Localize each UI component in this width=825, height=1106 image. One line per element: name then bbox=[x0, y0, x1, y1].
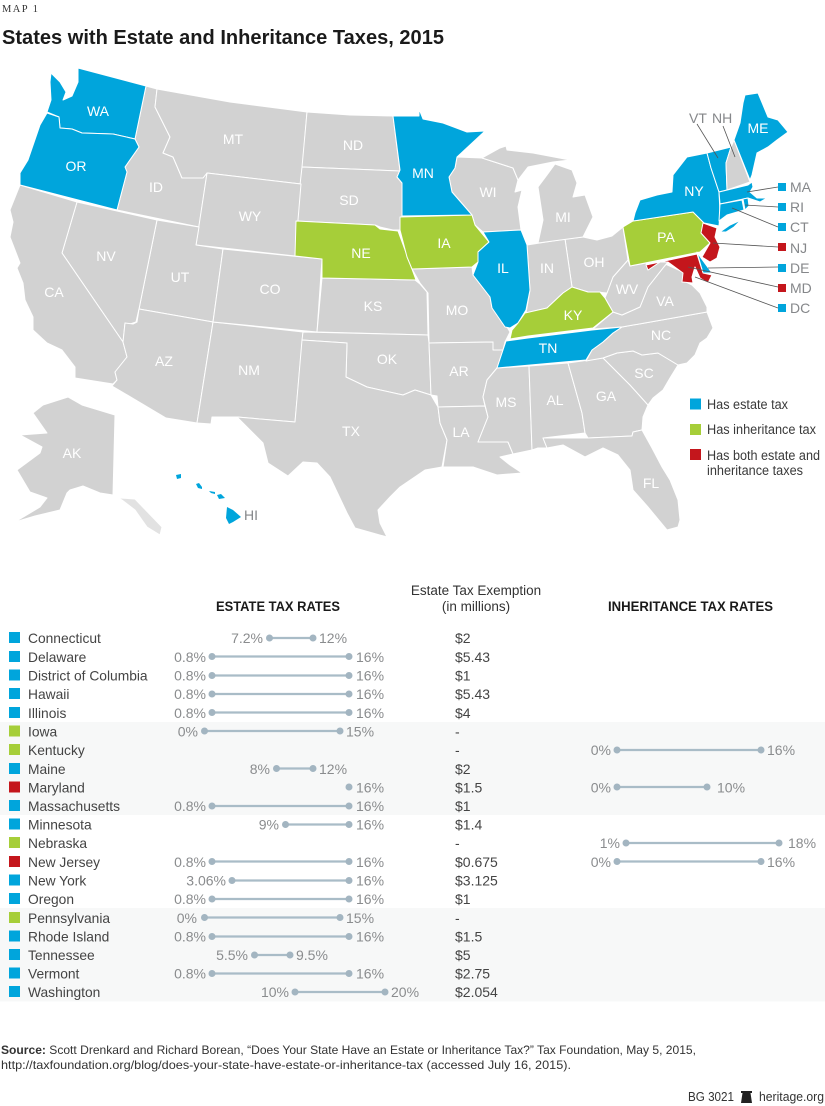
row: Hawaii: Hawaii bbox=[28, 687, 69, 702]
row: Minnesota: Minnesota bbox=[28, 818, 92, 832]
state: Oregon bbox=[20, 113, 139, 210]
state: North Carolina bbox=[586, 312, 713, 365]
state: Alaska panhandle bbox=[113, 495, 162, 535]
row: Nebraska: 18% bbox=[788, 835, 816, 851]
row: District of Columbia: $1 bbox=[455, 668, 471, 684]
state: Arizona: AZ bbox=[155, 353, 173, 369]
map legend: Has inheritance tax bbox=[707, 422, 816, 437]
row: Nebraska: - bbox=[455, 835, 460, 851]
row: Tennessee: Tennessee bbox=[28, 948, 95, 963]
row: New York bbox=[9, 872, 498, 888]
state: Alaska bbox=[15, 397, 115, 522]
state: Nebraska bbox=[295, 221, 416, 280]
row: Washington bbox=[9, 984, 498, 1000]
state: Minnesota: MN bbox=[412, 165, 434, 181]
state: California bbox=[10, 185, 127, 384]
state: Illinois: IL bbox=[497, 260, 509, 276]
row: District of Columbia bbox=[9, 668, 471, 684]
state: Rhode Island bbox=[743, 198, 749, 210]
state: Wisconsin: WI bbox=[479, 184, 497, 200]
row: Nebraska bbox=[9, 835, 816, 851]
state: Alabama: AL bbox=[546, 392, 564, 408]
row: Maine: $2 bbox=[455, 761, 471, 777]
row: Oregon: 0.8% bbox=[174, 891, 206, 907]
row: District of Columbia: District of Columbia bbox=[28, 668, 148, 684]
callout: MA label and leader bbox=[747, 179, 812, 195]
callout: CT label and leader bbox=[732, 208, 809, 235]
row: New Jersey: $0.675 bbox=[455, 854, 498, 870]
source note: http://taxfoundation.org/blog/does-your-state-have-estate-or-inheritance-tax (accessed July 16, 2015). bbox=[1, 1058, 571, 1072]
state: Ohio: OH bbox=[584, 254, 604, 270]
row: Illinois: 16% bbox=[356, 705, 384, 721]
row: New Jersey: New Jersey bbox=[28, 855, 100, 870]
row: Delaware: $5.43 bbox=[455, 649, 490, 665]
row: Massachusetts bbox=[9, 798, 471, 814]
row: Delaware: 16% bbox=[356, 649, 384, 665]
state: Arizona bbox=[112, 309, 213, 423]
callout: RI label and leader: RI bbox=[790, 199, 804, 215]
row: Pennsylvania: 15% bbox=[346, 910, 374, 926]
map legend: Has both estate and bbox=[707, 448, 820, 463]
row: New York: New York bbox=[28, 874, 86, 888]
state: Pennsylvania: PA bbox=[657, 229, 675, 245]
state: South Dakota bbox=[296, 167, 402, 230]
column heading: exemption bbox=[411, 583, 541, 614]
state: Maine bbox=[734, 93, 788, 180]
row: New York: 16% bbox=[356, 872, 384, 888]
state: Iowa bbox=[400, 215, 489, 269]
state: Arkansas bbox=[429, 342, 503, 407]
row: Kentucky: 0% bbox=[591, 742, 611, 758]
state: New Jersey bbox=[701, 223, 720, 262]
row: Delaware: Delaware bbox=[28, 650, 87, 665]
state: Delaware bbox=[697, 252, 712, 273]
row: Illinois: $4 bbox=[455, 705, 471, 721]
state: Idaho bbox=[117, 86, 207, 227]
state: South Carolina bbox=[603, 351, 678, 405]
state: South Carolina: SC bbox=[634, 365, 654, 381]
row: Pennsylvania: 0% bbox=[177, 910, 197, 926]
row: New York: $3.125 bbox=[455, 872, 498, 888]
row: Washington: Washington bbox=[28, 985, 100, 1000]
row: Iowa: - bbox=[455, 724, 460, 740]
row: Illinois: 0.8% bbox=[174, 705, 206, 721]
row: Maine: 8% bbox=[250, 761, 270, 777]
state: Washington bbox=[47, 68, 146, 139]
state: Texas bbox=[237, 340, 447, 537]
row: Oregon bbox=[9, 891, 471, 907]
row: Maryland: 10% bbox=[717, 780, 745, 796]
row: Kentucky: 16% bbox=[767, 742, 795, 758]
row: New Jersey: 16% bbox=[767, 854, 795, 870]
row: Hawaii: 0.8% bbox=[174, 686, 206, 702]
state: Hawaii bbox=[176, 474, 258, 524]
state: North Dakota bbox=[302, 112, 400, 171]
callout: RI label and leader bbox=[745, 199, 804, 215]
state: Texas: TX bbox=[342, 423, 361, 439]
row: Minnesota: $1.4 bbox=[455, 816, 482, 832]
state: New Hampshire bbox=[726, 140, 750, 190]
state: Indiana bbox=[526, 239, 572, 313]
row: Delaware: 0.8% bbox=[174, 649, 206, 665]
row: Maryland: $1.5 bbox=[455, 780, 482, 796]
row: Pennsylvania: - bbox=[455, 910, 460, 926]
footer: publication id: BG 3021 bbox=[688, 1090, 734, 1104]
state: Colorado: CO bbox=[260, 281, 281, 297]
row: Nebraska: 1% bbox=[600, 835, 620, 851]
state: Oregon: OR bbox=[66, 158, 86, 174]
state: Hawaii: HI bbox=[244, 507, 258, 523]
row: Nebraska: Nebraska bbox=[28, 836, 87, 851]
state: Iowa: IA bbox=[437, 235, 451, 251]
row: Rhode Island: Rhode Island bbox=[28, 930, 109, 944]
state: New York: NY bbox=[684, 183, 704, 199]
map label: MAP 1: MAP 1 bbox=[2, 4, 38, 15]
state: Tennessee bbox=[497, 327, 622, 368]
row: Washington: 20% bbox=[391, 984, 419, 1000]
row: Rhode Island bbox=[9, 928, 482, 944]
row: Hawaii: 16% bbox=[356, 686, 384, 702]
row: Kentucky bbox=[9, 742, 795, 758]
state: West Virginia: WV bbox=[616, 281, 639, 297]
row: Vermont: 16% bbox=[356, 966, 384, 982]
callout: VT label and leader bbox=[689, 110, 718, 158]
row: Massachusetts: 0.8% bbox=[174, 798, 206, 814]
state: Mississippi bbox=[478, 366, 532, 454]
row: Washington: 10% bbox=[261, 984, 289, 1000]
row: District of Columbia: 0.8% bbox=[174, 668, 206, 684]
callout: DC label and leader bbox=[695, 277, 810, 316]
row: District of Columbia: 16% bbox=[356, 668, 384, 684]
row: Rhode Island: 16% bbox=[356, 928, 384, 944]
state: Alaska: AK bbox=[63, 445, 82, 461]
row: Iowa: 0% bbox=[178, 724, 198, 740]
state: New York bbox=[633, 153, 720, 226]
state: Georgia: GA bbox=[596, 388, 617, 404]
row: Maine: 12% bbox=[319, 761, 347, 777]
callout: NH label and leader bbox=[712, 110, 735, 157]
state: Montana bbox=[155, 89, 307, 184]
callout: MA label and leader: MA bbox=[790, 179, 812, 195]
state: Maine: ME bbox=[748, 120, 768, 136]
footer: website: heritage.org bbox=[759, 1090, 824, 1104]
row: Maryland bbox=[9, 780, 745, 796]
callout: DE label and leader bbox=[708, 260, 809, 276]
state: Louisiana: LA bbox=[452, 424, 470, 440]
state: Nevada bbox=[62, 202, 157, 342]
source note: Source: Scott Drenkard and Richard Borean, “Does Your State Have an Estate or Inheritance Tax?” Tax Foundation, May 5, 2015, bbox=[1, 1043, 696, 1057]
row: Rhode Island: 0.8% bbox=[174, 928, 206, 944]
state: Montana: MT bbox=[223, 131, 244, 147]
state: New Mexico bbox=[197, 322, 303, 424]
state: South Dakota: SD bbox=[339, 192, 359, 208]
callout: MD label and leader: MD bbox=[790, 280, 812, 296]
state: Colorado bbox=[213, 249, 322, 332]
state: Ohio bbox=[565, 227, 628, 293]
row: Vermont bbox=[9, 966, 490, 982]
state: Kansas bbox=[317, 278, 428, 335]
row: Iowa: Iowa bbox=[28, 724, 57, 740]
state: Oklahoma: OK bbox=[377, 351, 398, 367]
row: New Jersey: 0.8% bbox=[174, 854, 206, 870]
state: Kentucky bbox=[510, 287, 613, 339]
callout: NJ label and leader: NJ bbox=[790, 240, 807, 256]
table rows bbox=[9, 630, 816, 1000]
row: Connecticut bbox=[9, 630, 471, 646]
state: Kentucky: KY bbox=[564, 307, 583, 323]
state: California: CA bbox=[44, 284, 64, 300]
row: New York: 3.06% bbox=[186, 872, 226, 888]
row: Massachusetts: 16% bbox=[356, 798, 384, 814]
source note bbox=[1, 1043, 696, 1072]
state: Kansas: KS bbox=[364, 298, 382, 314]
row: Maine: Maine bbox=[28, 762, 66, 777]
row: Minnesota bbox=[9, 816, 482, 832]
row: Connecticut: 7.2% bbox=[231, 630, 263, 646]
callout: CT label and leader: CT bbox=[790, 219, 809, 235]
row: Oregon: Oregon bbox=[28, 892, 74, 907]
row: Iowa: 15% bbox=[346, 724, 374, 740]
icon: liberty bell bbox=[741, 1091, 752, 1103]
row: Delaware bbox=[9, 649, 490, 665]
state: Mississippi: MS bbox=[496, 394, 516, 410]
map legend: inheritance taxes bbox=[707, 463, 803, 478]
column heading: exemption: (in millions) bbox=[442, 599, 510, 614]
state: Tennessee: TN bbox=[539, 340, 557, 356]
state: Michigan bbox=[538, 164, 593, 243]
row: Pennsylvania: Pennsylvania bbox=[28, 911, 110, 926]
row: Hawaii bbox=[9, 686, 490, 702]
row: Oregon: $1 bbox=[455, 891, 471, 907]
row: Pennsylvania bbox=[9, 910, 460, 926]
state: New Mexico: NM bbox=[238, 362, 260, 378]
row: Maryland: Maryland bbox=[28, 780, 85, 796]
row: Hawaii: $5.43 bbox=[455, 686, 490, 702]
row: Iowa bbox=[9, 724, 460, 740]
state: Nebraska: NE bbox=[351, 245, 371, 261]
callout: NH label and leader: NH bbox=[712, 110, 732, 126]
row: Massachusetts: $1 bbox=[455, 798, 471, 814]
state: Missouri bbox=[412, 267, 510, 350]
row: Massachusetts: Massachusetts bbox=[28, 799, 120, 814]
state: Pennsylvania bbox=[623, 212, 710, 266]
state: Missouri: MO bbox=[446, 302, 468, 318]
state: Louisiana bbox=[438, 406, 522, 475]
map legend bbox=[690, 397, 820, 478]
state: Idaho: ID bbox=[149, 179, 163, 195]
state: Maryland bbox=[646, 254, 712, 283]
state: Indiana: IN bbox=[540, 260, 554, 276]
state: Virginia: VA bbox=[656, 293, 674, 309]
row: Tennessee: $5 bbox=[455, 947, 471, 963]
row: Vermont: $2.75 bbox=[455, 966, 490, 982]
state: North Dakota: ND bbox=[343, 137, 363, 153]
row: Maryland: 16% bbox=[356, 780, 384, 796]
state: Wisconsin bbox=[449, 157, 522, 232]
state: Florida bbox=[543, 430, 680, 530]
state: Utah bbox=[139, 220, 223, 322]
state: Long Island bbox=[720, 220, 741, 232]
title: States with Estate and Inheritance Taxes, 2015 bbox=[2, 26, 444, 49]
state: Wyoming bbox=[196, 173, 301, 256]
row: Kentucky: Kentucky bbox=[28, 743, 85, 758]
row: Tennessee bbox=[9, 947, 471, 963]
callout: MD label and leader bbox=[688, 267, 812, 296]
column heading: inheritance tax rates: INHERITANCE TAX RATES bbox=[608, 599, 773, 614]
map legend: Has estate tax bbox=[707, 397, 788, 412]
row: Illinois: Illinois bbox=[28, 706, 66, 721]
row: Illinois bbox=[9, 705, 471, 721]
state: Massachusetts bbox=[719, 182, 767, 204]
row: Maryland: 0% bbox=[591, 780, 611, 796]
state: Minnesota bbox=[393, 109, 485, 216]
row: Kentucky: - bbox=[455, 742, 460, 758]
row: New Jersey: 16% bbox=[356, 854, 384, 870]
state: Vermont bbox=[707, 147, 731, 192]
state: North Carolina: NC bbox=[651, 327, 671, 343]
row: Oregon: 16% bbox=[356, 891, 384, 907]
state: West Virginia bbox=[605, 260, 668, 315]
table row bands bbox=[0, 722, 825, 1002]
row: Washington: $2.054 bbox=[455, 984, 498, 1000]
row: Tennessee: 5.5% bbox=[216, 947, 248, 963]
state: Nevada: NV bbox=[96, 248, 116, 264]
state: Arkansas: AR bbox=[449, 363, 469, 379]
column heading: exemption: Estate Tax Exemption bbox=[411, 583, 541, 598]
row: New Jersey: 0% bbox=[591, 854, 611, 870]
state: Michigan: MI bbox=[555, 209, 571, 225]
row: Vermont: 0.8% bbox=[174, 966, 206, 982]
state: Oklahoma bbox=[302, 332, 431, 395]
state: Florida: FL bbox=[643, 475, 659, 491]
state: Washington: WA bbox=[87, 103, 110, 119]
row: Maine bbox=[9, 761, 471, 777]
row: Connecticut: 12% bbox=[319, 630, 347, 646]
row: Minnesota: 9% bbox=[259, 816, 279, 832]
callout: NJ label and leader bbox=[713, 240, 807, 256]
state: Alabama bbox=[529, 363, 585, 450]
row: Vermont: Vermont bbox=[28, 966, 80, 982]
column heading: estate tax rates: ESTATE TAX RATES bbox=[216, 599, 340, 614]
row: Connecticut: $2 bbox=[455, 630, 471, 646]
state: Illinois bbox=[473, 230, 530, 328]
state: Connecticut bbox=[719, 200, 744, 221]
map: United States bbox=[10, 68, 788, 537]
state: Utah: UT bbox=[171, 269, 190, 285]
callout: VT label and leader: VT bbox=[689, 110, 707, 126]
row: Rhode Island: $1.5 bbox=[455, 928, 482, 944]
row: Tennessee: 9.5% bbox=[296, 947, 328, 963]
callout: DC label and leader: DC bbox=[790, 300, 810, 316]
row: New Jersey bbox=[9, 854, 795, 870]
state: Georgia bbox=[568, 358, 648, 438]
state: Wyoming: WY bbox=[239, 208, 262, 224]
row: Connecticut: Connecticut bbox=[28, 631, 101, 646]
state: Michigan upper peninsula bbox=[482, 146, 570, 180]
callout: DE label and leader: DE bbox=[790, 260, 809, 276]
row: Minnesota: 16% bbox=[356, 816, 384, 832]
state: Virginia bbox=[593, 263, 707, 329]
